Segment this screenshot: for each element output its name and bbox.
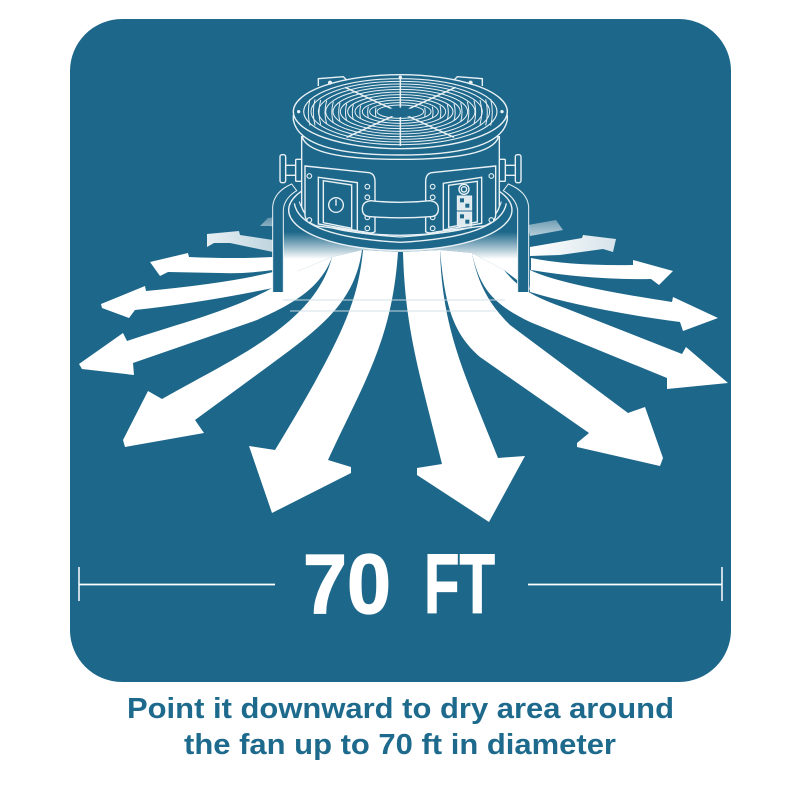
left arrow 6 <box>249 250 398 513</box>
panel screws <box>430 174 494 231</box>
faint arrow behind right leg <box>528 220 563 236</box>
rim bolts <box>297 76 504 113</box>
fan grille <box>308 77 492 146</box>
panel screws <box>307 174 370 231</box>
right knob <box>499 155 521 183</box>
left arrow 3 <box>101 272 273 318</box>
dimension label <box>303 537 495 631</box>
motor housing <box>302 137 499 235</box>
icon: power dial <box>329 198 343 212</box>
carry handle <box>362 201 438 218</box>
left knob <box>280 155 302 183</box>
top mounting brackets <box>318 77 482 86</box>
central airflow glow <box>283 232 530 292</box>
rim <box>293 75 507 159</box>
right arrow 6 <box>403 250 525 522</box>
icon: outlet two <box>457 212 472 226</box>
floor ring lines <box>283 300 505 311</box>
caption line one: Point it downward to dry area around <box>127 693 674 725</box>
icon: outlet one <box>457 196 472 210</box>
left arrow 2 <box>150 253 273 276</box>
fan illustration <box>273 75 529 292</box>
dimension label: 70 <box>303 537 391 631</box>
right arrow 3 <box>530 270 718 331</box>
left arrow 1 <box>207 231 273 252</box>
right arrow 2 <box>531 258 673 285</box>
right arrow 4 <box>472 253 728 389</box>
caption line two: the fan up to 70 ft in diameter <box>184 729 616 761</box>
left control panel <box>305 166 375 233</box>
left arrow 5 <box>123 250 362 447</box>
caption <box>127 693 674 761</box>
left arrow 4 <box>79 257 332 375</box>
dimension label: FT <box>424 537 495 631</box>
dimension line: left <box>79 567 275 601</box>
dimension line: right <box>528 567 722 601</box>
icon: dial <box>459 184 469 194</box>
base ring <box>289 170 512 250</box>
right arrow 1 <box>530 235 616 256</box>
panel: teal background <box>70 19 731 682</box>
airflow arrows <box>79 216 728 522</box>
right control panel <box>426 166 496 233</box>
faint arrow behind left leg <box>260 216 283 228</box>
right stand leg <box>503 184 529 292</box>
left stand leg <box>273 184 297 292</box>
right arrow 5 <box>440 250 663 466</box>
fan hub <box>385 108 416 117</box>
